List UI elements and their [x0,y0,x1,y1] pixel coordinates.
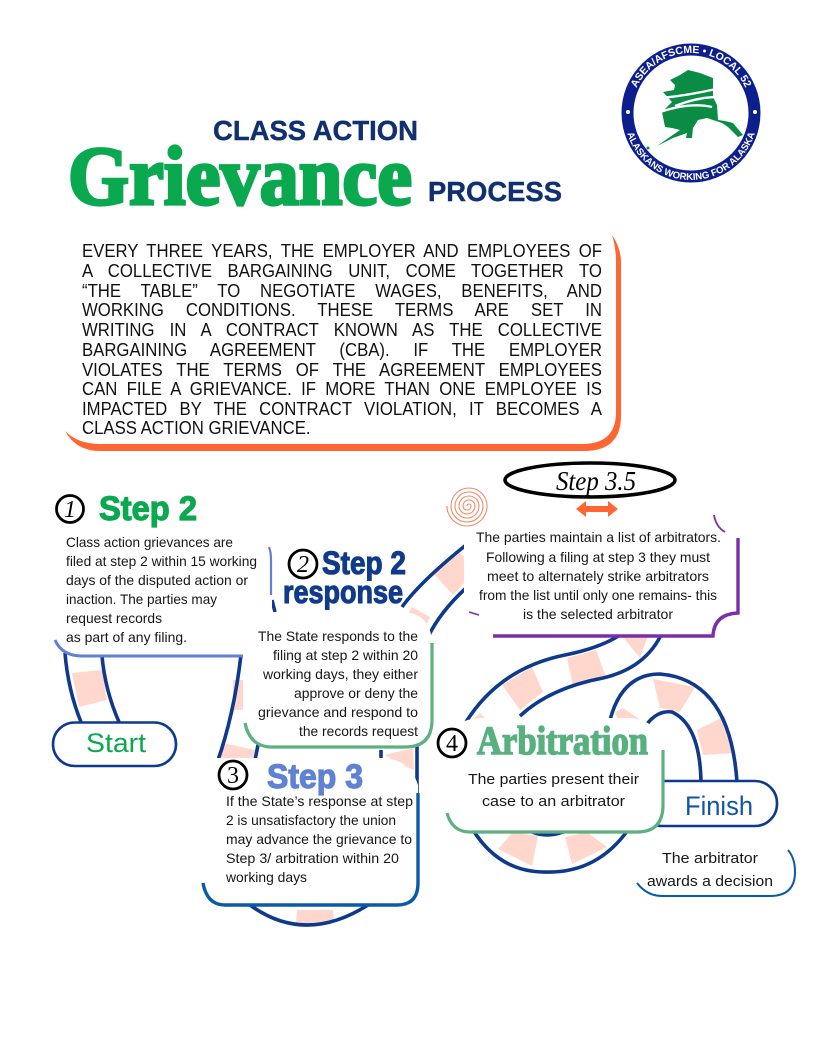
intro paragraph: CAN FILE A GRIEVANCE. IF MORE THAN ONE EMPLOYEE IS [82,379,602,399]
step 3.5 badge: Step 3.5 [556,466,636,496]
game board track [65,545,737,925]
step 1 heading: Step 2 [99,490,197,528]
start pill: Start [86,728,147,758]
step 4 number [438,729,466,757]
step 2 response text [258,628,418,739]
logo: union seal [622,44,760,182]
step 1 text: inaction. The parties may [66,591,217,607]
step 3 number: 3 [227,763,239,789]
title: process: PROCESS [428,176,562,207]
start pill [53,722,176,766]
step 1 text: as part of any filing. [66,629,187,645]
step 2 response heading: Step 2 [322,545,406,581]
intro paragraph: A COLLECTIVE BARGAINING UNIT, COME TOGETHER TO [82,261,602,281]
step 3.5 text: Following a filing at step 3 they must [486,549,710,565]
panel: arbitration [438,718,664,832]
step 1 text: days of the disputed action or [66,572,248,588]
panel: intro border [65,235,621,451]
step 3.5 text: The parties maintain a list of arbitrators. [476,529,721,545]
intro paragraph: CLASS ACTION GRIEVANCE. [82,418,311,438]
step 2 number: 2 [297,552,309,578]
arbitration text [468,771,639,810]
panel: decision: awards a decision [647,873,773,890]
step 2 response text: The State responds to the [258,628,418,644]
intro paragraph: WRITING IN A CONTRACT KNOWN AS THE COLLECTIVE [82,320,602,340]
arrow: double headed [576,501,618,517]
step 3.5 text: meet to alternately strike arbitrators [487,568,709,584]
intro paragraph: EVERY THREE YEARS, THE EMPLOYER AND EMPLOYEES OF [82,241,602,261]
arbitration heading: Arbitration [477,718,648,763]
panel: step 2 response [245,612,432,747]
step 3 text: Step 3/ arbitration within 20 [226,850,399,866]
step 3.5 text: is the selected arbitrator [523,606,673,622]
step 2 response text: filing at step 2 within 20 [273,647,418,663]
panel: decision: The arbitrator [662,850,758,867]
intro paragraph: VIOLATES THE TERMS OF THE AGREEMENT EMPLOYEES [82,360,602,380]
step 1 text: request records [66,610,162,626]
intro paragraph: “THE TABLE” TO NEGOTIATE WAGES, BENEFITS, AND [82,281,602,301]
title: grievance: Grievance [68,130,412,223]
step 2 response text: grievance and respond to [258,704,418,720]
spiral icon [447,488,487,526]
panel: step 1 [50,528,272,656]
step 2 response text: the records request [299,723,418,739]
step 2 response heading [283,545,406,610]
step 2 response text: working days, they either [262,666,418,682]
arbitration text: The parties present their [468,771,639,788]
logo: union seal: ALASKANS WORKING FOR ALASKA [627,134,755,180]
panel: step 3 [203,758,418,905]
step 1 text: filed at step 2 within 15 working [66,553,257,569]
panel: step 3.5 [464,515,738,636]
step 3 text: If the State’s response at step [226,793,413,809]
finish pill: Finish [685,791,753,821]
step 3.5 text [476,529,721,622]
step 1 number [56,496,84,523]
step 1 number: 1 [64,497,76,523]
title: class action: CLASS ACTION [213,115,418,146]
step 3.5 text: from the list until only one remains- this [479,587,717,603]
step 1 text [66,534,257,645]
step 3 number [219,761,247,789]
logo: union seal: ASEA/AFSCME • LOCAL 52 [631,46,752,88]
step 3 heading: Step 3 [267,758,363,796]
panel: decision [637,850,795,896]
step 3 text: 2 is unsatisfactory the union [226,812,396,828]
finish pill [640,781,777,826]
intro paragraph: IMPACTED BY THE CONTRACT VIOLATION, IT BECOMES A [82,399,602,419]
step 3 text [225,793,413,885]
step 3 text: working days [225,869,307,885]
intro paragraph: BARGAINING AGREEMENT (CBA). IF THE EMPLOYER [82,340,602,360]
arbitration text: case to an arbitrator [482,793,625,810]
step 2 number [289,550,317,578]
step 1 text: Class action grievances are [66,534,233,550]
step 3 text: may advance the grievance to [226,831,412,847]
step 3.5 badge [505,463,675,497]
intro paragraph: WORKING CONDITIONS. THESE TERMS ARE SET IN [82,300,602,320]
step 2 response heading: response [283,574,403,610]
step 2 response text: approve or deny the [294,685,418,701]
step 4 number: 4 [446,731,458,757]
